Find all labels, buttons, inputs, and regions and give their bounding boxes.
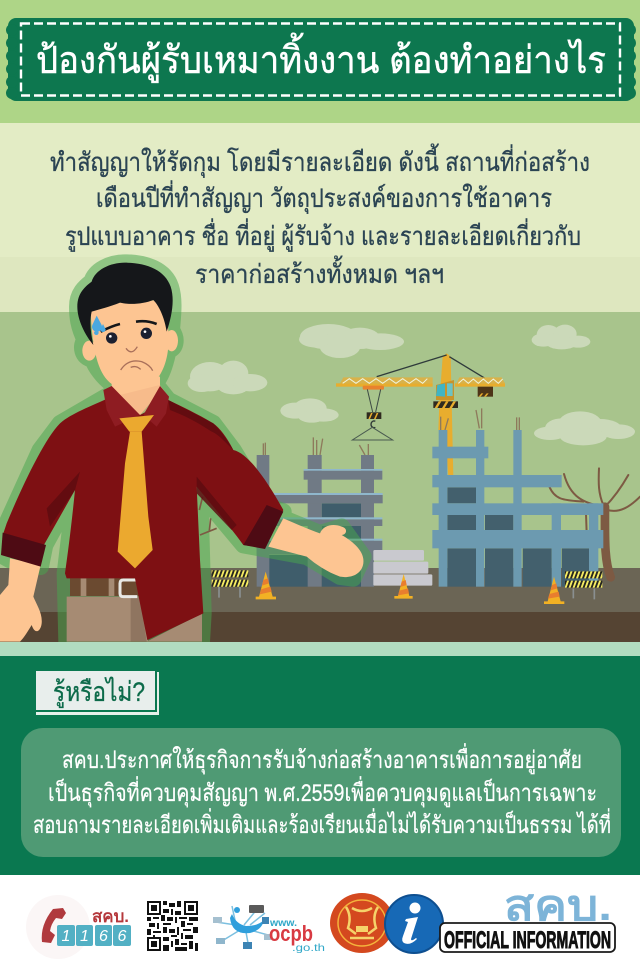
intro text block xyxy=(50,143,590,289)
footer logo: ocpb website xyxy=(213,905,325,954)
left building xyxy=(257,437,383,587)
footer logo: ocpb website: ocpb xyxy=(269,921,313,946)
man illustration xyxy=(0,263,363,642)
footer logo: hotline 1166: 6 xyxy=(99,928,108,945)
footer logo: ocpb website: www. xyxy=(269,918,297,929)
header band xyxy=(0,0,640,123)
crane xyxy=(336,353,505,477)
lower intro background xyxy=(0,257,640,312)
footer logo: hotline 1166: 6 xyxy=(118,928,127,945)
necktie xyxy=(118,415,154,568)
footer logo: hotline 1166: สคบ. xyxy=(92,907,129,926)
intro text block: ราคาก่อสร้างทั้งหมด ฯลฯ xyxy=(195,255,444,289)
nose and mouth xyxy=(121,347,153,371)
footer logo: hotline 1166: 1 xyxy=(62,928,70,945)
footer logo: hotline 1166: 1 xyxy=(80,928,89,945)
behind-man branch xyxy=(199,497,217,535)
footer logo: official information xyxy=(440,882,615,954)
pipes xyxy=(373,550,432,586)
tree xyxy=(549,468,640,577)
hair xyxy=(77,263,173,345)
intro text block: เดือนปีที่ทำสัญญา วัตถุประสงค์ของการใช้อาคาร xyxy=(96,180,552,214)
info text xyxy=(33,743,611,839)
construction scene xyxy=(0,312,640,642)
light divider band xyxy=(0,642,640,656)
road barriers xyxy=(212,570,602,599)
ground xyxy=(0,568,640,612)
did-you-know label xyxy=(36,671,159,715)
green halo xyxy=(1,263,363,642)
footer logo: QR code xyxy=(147,901,198,951)
footer logo: government seal xyxy=(330,893,394,953)
clouds xyxy=(188,324,635,445)
shirt cuffs xyxy=(1,505,283,567)
scene artwork xyxy=(188,324,640,604)
title banner xyxy=(6,18,636,101)
right building xyxy=(432,408,603,587)
did-you-know section xyxy=(0,656,640,875)
shirt shading folds xyxy=(47,400,237,530)
sweat drops xyxy=(92,316,106,335)
eyes and brows xyxy=(101,321,157,344)
road xyxy=(0,612,640,642)
footer logo: official information: สคบ. xyxy=(504,882,612,929)
sky xyxy=(0,312,640,568)
belt xyxy=(70,578,140,597)
intro text background xyxy=(0,123,640,257)
footer logo: info icon xyxy=(385,895,443,953)
trousers xyxy=(67,597,148,642)
ears and neck xyxy=(82,330,178,415)
right forearm and hand xyxy=(268,518,363,577)
collar xyxy=(103,386,169,427)
footer logo: ocpb website: .go.th xyxy=(292,943,325,954)
traffic cones xyxy=(256,572,564,604)
info panel xyxy=(21,728,621,857)
footer logo: hotline 1166 xyxy=(26,895,131,959)
label text: รู้หรือไม่? xyxy=(53,677,145,708)
face xyxy=(91,300,169,389)
left forearm and hand xyxy=(0,558,42,642)
maroon shirt xyxy=(3,397,283,640)
